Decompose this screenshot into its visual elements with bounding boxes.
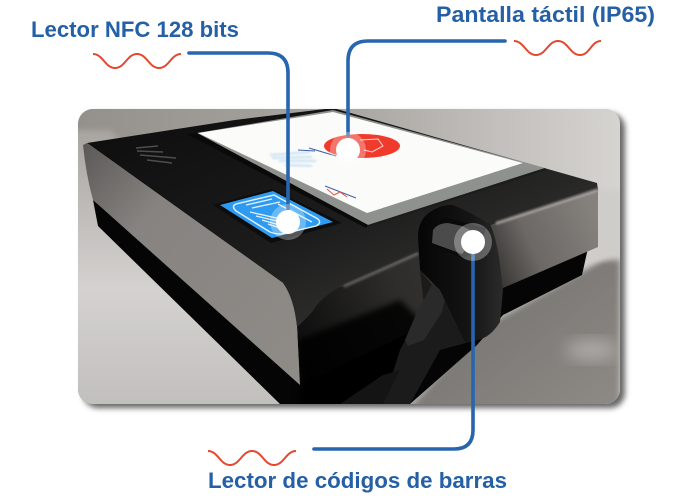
barcode scanner [340,205,503,404]
marker: barcode [454,223,492,261]
label: NFC: Lector NFC 128 bits [31,17,239,42]
device top surface [87,108,598,327]
wave: touchscreen [514,41,601,55]
device lower black band [93,200,588,404]
callout line: NFC [189,53,288,210]
scanner trigger [405,284,444,346]
logo mark [136,146,176,163]
marker: touchscreen [330,132,366,168]
photo panel: device [60,108,625,420]
screen logo [324,134,400,158]
marker: NFC [270,204,306,240]
callout line: touchscreen [348,41,505,135]
label: touchscreen: Pantalla táctil (IP65) [436,2,655,27]
scanner handle [383,270,477,404]
front crease highlights [345,190,597,286]
screen text [270,152,316,166]
wave: NFC [93,54,181,68]
touchscreen [187,110,546,228]
callout line: barcode [314,255,473,449]
wave: barcode [208,451,296,465]
label: barcode: Lector de códigos de barras [208,468,507,493]
scanner head [418,205,503,342]
front shadow [298,299,416,384]
NFC pad [213,189,342,243]
device silver side [83,143,300,385]
photo background [60,109,625,420]
device front face [283,188,598,385]
